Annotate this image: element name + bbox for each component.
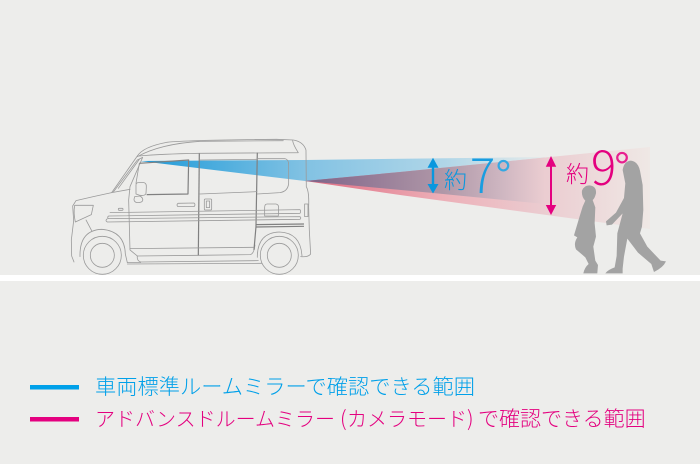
door latch [204, 199, 212, 210]
legend text: advanced: ) [467, 403, 474, 433]
text: 約 7°: 約 [444, 161, 467, 195]
arrow: 9 degree span [546, 156, 556, 215]
side marker [118, 208, 123, 210]
tail lamp [305, 204, 308, 217]
label: 7 degrees [428, 138, 512, 207]
arrow: 7 degree span [428, 158, 438, 194]
rear wheel arch [257, 232, 302, 257]
body outline [71, 139, 311, 262]
front wheel [83, 236, 121, 274]
legend text: standard: 車両標準ルームミラーで確認できる範囲 [95, 371, 475, 401]
text: 約 9°: 約 [566, 155, 589, 189]
label: 9 degrees: 9 [591, 130, 616, 199]
rear window [257, 159, 289, 194]
legend text: advanced: ( [340, 403, 347, 433]
side mirror [136, 183, 146, 195]
fuel lid [265, 204, 279, 216]
child silhouette [574, 185, 598, 273]
ground strip [0, 275, 700, 281]
label: 7 degrees: 7 [470, 138, 495, 207]
body side stripes [106, 210, 301, 222]
silhouettes [574, 161, 666, 273]
front wheel arch [80, 229, 141, 263]
legend text: advanced: カメラモード [347, 403, 467, 432]
legend line: standard [30, 385, 79, 390]
label: 7 degrees: ° [495, 151, 512, 198]
woman silhouette [605, 161, 666, 273]
standard mirror cone [140, 160, 305, 181]
label: 9 degrees: ° [614, 143, 630, 190]
legend line: advanced [30, 417, 79, 422]
car line drawing [71, 139, 311, 274]
windscreen pillar [113, 157, 255, 256]
sill lines [127, 247, 262, 264]
door handle [177, 203, 195, 207]
legend [30, 371, 646, 433]
roof inner line [139, 141, 298, 156]
camera mode cone [305, 147, 650, 229]
front door window [139, 160, 189, 195]
door divider [197, 153, 201, 255]
legend text: advanced: で確認できる範囲 [478, 403, 646, 433]
label: 9 degrees [546, 130, 630, 215]
sliding door window [200, 159, 257, 194]
vision cones [140, 147, 650, 229]
rear wheel [260, 236, 298, 274]
legend text: advanced: アドバンスドルームミラー [95, 403, 335, 432]
headlight [74, 205, 93, 222]
standard mirror cone far side [305, 157, 545, 204]
overlap of both cones [305, 158, 545, 204]
